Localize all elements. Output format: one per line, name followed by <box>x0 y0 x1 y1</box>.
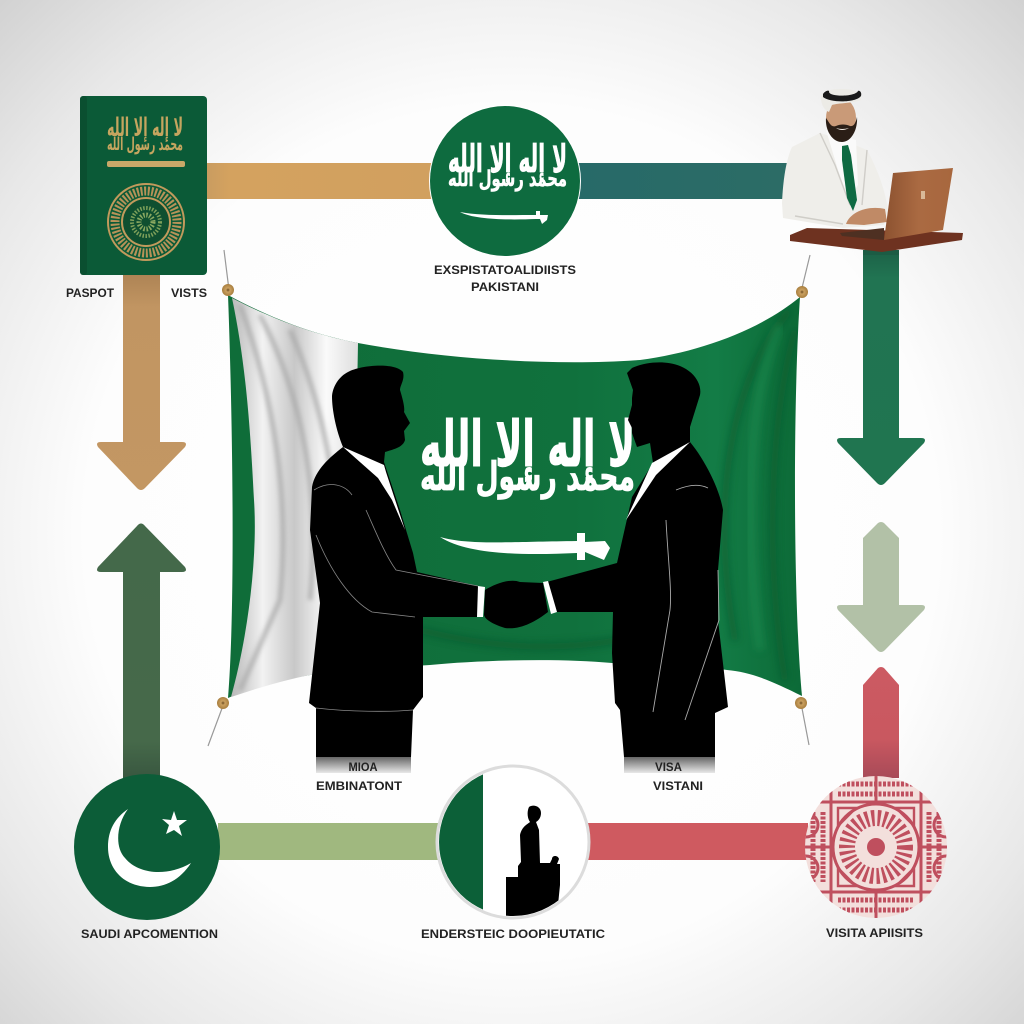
right man fade <box>624 757 715 773</box>
right cuff <box>543 581 557 614</box>
arrow: dark green up arrow <box>97 524 186 780</box>
passport seal <box>108 184 184 260</box>
keffiyeh <box>821 89 861 112</box>
right collar <box>626 442 690 520</box>
label: visits: VISTS <box>171 288 207 300</box>
icon: official at laptop <box>782 89 963 255</box>
jacket <box>782 133 888 228</box>
arrow: green down arrow <box>837 250 925 485</box>
flag sword <box>440 533 610 560</box>
stand <box>863 250 899 255</box>
arrow: light green bar <box>218 823 440 860</box>
label: right man: VISTANI <box>653 781 703 793</box>
flag calligraphy: لا إله إلا الله <box>420 407 635 481</box>
panel: hanging Saudi flag <box>208 250 810 746</box>
left collar <box>343 447 405 530</box>
label: top circle: EXSPISTATOALIDIISTS <box>434 265 576 277</box>
label: left man: MIOA <box>348 762 378 774</box>
flag white band <box>231 298 358 697</box>
circle calligraphy: محمد رسول الله <box>448 165 567 191</box>
left man fade <box>316 757 411 773</box>
podium and figure <box>506 806 560 925</box>
passport gold line <box>107 161 185 167</box>
flag pins <box>217 284 808 709</box>
beard <box>826 117 857 142</box>
label: top circle <box>434 265 576 294</box>
small sword <box>460 211 548 224</box>
label: passport: PASPOT <box>66 288 114 300</box>
smile <box>836 128 849 130</box>
circle calligraphy: لا إله إلا الله <box>448 136 567 183</box>
label: diplomat circle: ENDERSTEIC DOOPIEUTATIC <box>421 929 605 941</box>
arrow: red bar <box>586 823 808 860</box>
label: Pakistan circle: SAUDI APCOMENTION <box>81 929 218 941</box>
label: top circle: PAKISTANI <box>471 282 539 294</box>
flag wires <box>208 250 810 746</box>
label: stamp: VISITA APIISITS <box>826 928 923 940</box>
right man silhouette <box>543 362 728 757</box>
clasped hands <box>484 581 548 628</box>
arrow: pale green arrow <box>837 522 925 652</box>
table <box>790 228 963 252</box>
green half <box>439 774 483 910</box>
label: left man <box>316 762 402 793</box>
shirt <box>826 130 858 200</box>
stamp side medallions <box>806 814 820 838</box>
arrow: red up arrow <box>863 667 899 778</box>
passport calligraphy: لا إله إلا الله <box>107 114 183 143</box>
icon: Saudi flag circle <box>429 105 581 257</box>
face <box>826 98 856 138</box>
label: right man <box>653 762 703 793</box>
label: left man: EMBINATONT <box>316 781 402 793</box>
passport calligraphy <box>107 114 183 155</box>
crescent <box>108 809 191 887</box>
flag calligraphy: محمد رسول الله <box>420 453 635 499</box>
icon: green passport <box>80 96 207 275</box>
star <box>162 811 187 836</box>
stamp rosette <box>833 804 919 890</box>
right suit seams <box>653 485 719 720</box>
agal <box>823 91 861 101</box>
laptop logo <box>921 191 925 199</box>
handshake group <box>309 362 728 773</box>
green folds <box>420 310 795 680</box>
left man silhouette <box>309 366 478 757</box>
laptop screen <box>884 168 953 240</box>
arrow: passport to Saudi emblem bar <box>207 163 432 199</box>
white band folds <box>240 305 338 690</box>
arrow: tan down arrow <box>97 275 186 490</box>
tie <box>842 145 857 211</box>
arrow: Saudi emblem to official bar <box>578 163 792 199</box>
flag green field <box>228 295 802 698</box>
passport calligraphy: محمد رسول الله <box>107 134 183 155</box>
left cuff <box>477 586 485 617</box>
jacket shadow <box>795 133 867 224</box>
left suit seams <box>314 485 478 711</box>
icon: visa stamp seal <box>805 776 947 918</box>
stamp corners <box>838 808 914 886</box>
icon: diplomat circle <box>435 765 589 925</box>
label: right man: VISA <box>655 762 682 774</box>
icon: Pakistan flag circle <box>74 774 220 920</box>
hands <box>846 208 887 225</box>
keyboard base <box>840 228 884 240</box>
stamp grid <box>805 775 947 920</box>
